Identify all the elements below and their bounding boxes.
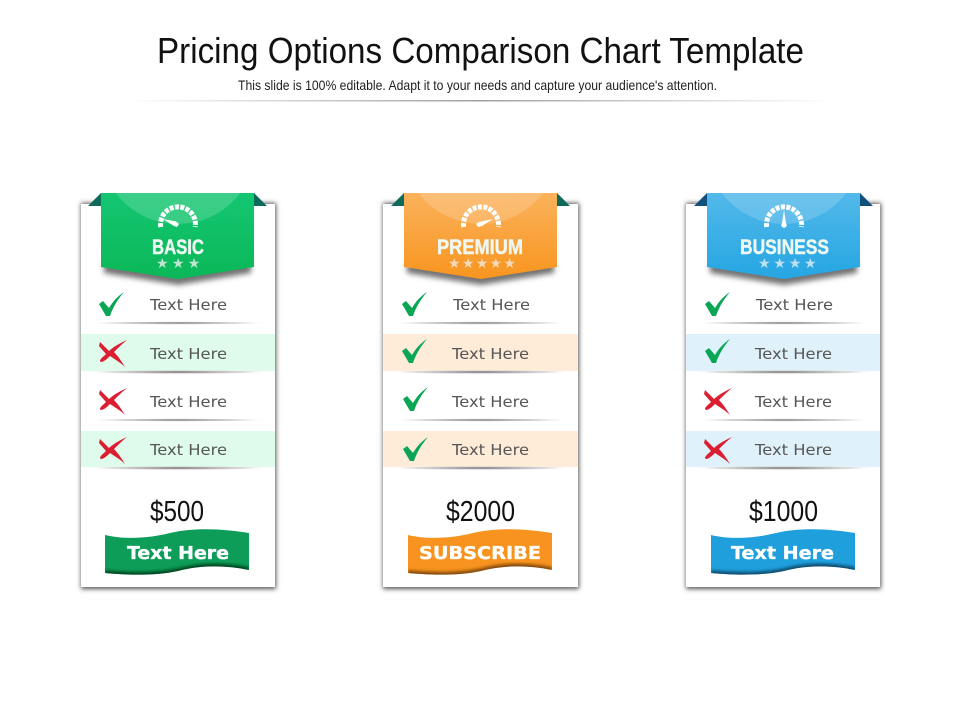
title: Pricing Options Comparison Chart Template — [157, 30, 804, 71]
icon: gauge — [766, 207, 802, 228]
feature row 2: Text Here — [451, 345, 529, 363]
feature row 2 — [686, 334, 880, 374]
stars: ★★★ — [156, 256, 204, 272]
feature row 3: Text Here — [754, 393, 832, 411]
basic header ribbon — [88, 193, 267, 288]
button — [408, 529, 552, 575]
button: SUBSCRIBE — [419, 543, 541, 564]
subtitle: This slide is 100% editable. Adapt it to your needs and capture your audience's attention. — [238, 77, 717, 93]
button — [711, 529, 855, 575]
stars: ★★★★★ — [448, 256, 517, 272]
feature row 3 — [391, 387, 571, 422]
feature row 3: Text Here — [451, 393, 529, 411]
panel: premium plan — [380, 193, 582, 592]
feature row 1 — [694, 292, 874, 324]
plan name: BASIC — [152, 236, 204, 259]
feature row 1: Text Here — [755, 296, 833, 314]
feature row 4 — [686, 431, 880, 470]
feature row 2: Text Here — [754, 345, 832, 363]
icon: gauge — [160, 207, 196, 227]
feature row 2 — [383, 334, 578, 374]
feature row 1 — [88, 292, 268, 324]
business header ribbon — [694, 193, 873, 288]
icon: gauge — [463, 207, 498, 227]
feature row 1 — [391, 292, 571, 324]
feature row 3 — [694, 388, 874, 422]
plan name: BUSINESS — [740, 236, 829, 259]
feature row 3 — [88, 388, 268, 422]
feature row 4: Text Here — [149, 441, 227, 459]
stars: ★★★★ — [758, 256, 819, 272]
feature row 3: Text Here — [149, 393, 227, 411]
feature row 4 — [383, 431, 578, 470]
plan name: PREMIUM — [437, 236, 523, 259]
feature row 4: Text Here — [451, 441, 529, 459]
panel: basic plan — [78, 193, 280, 592]
feature row 2 — [81, 334, 275, 374]
button — [105, 529, 249, 575]
feature row 2: Text Here — [149, 345, 227, 363]
price: $1000 — [749, 496, 818, 528]
feature row 4 — [81, 431, 275, 470]
price: $2000 — [446, 496, 515, 528]
price: $500 — [150, 496, 204, 528]
feature row 1: Text Here — [452, 296, 530, 314]
feature row 4: Text Here — [754, 441, 832, 459]
panel: business plan — [682, 193, 884, 592]
button: Text Here — [731, 543, 834, 564]
premium header ribbon — [391, 193, 570, 288]
feature row 1: Text Here — [149, 296, 227, 314]
button: Text Here — [127, 543, 229, 564]
